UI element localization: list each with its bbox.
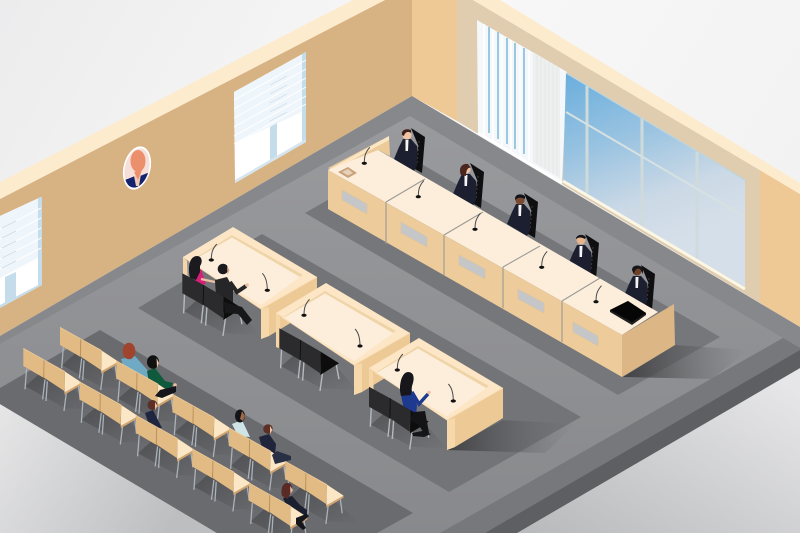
person: woman in row 2	[281, 483, 307, 520]
judges' bench	[328, 136, 675, 377]
row 2 chair pair 3	[136, 415, 210, 478]
left window 1	[0, 197, 42, 308]
floor zone: tables	[138, 234, 581, 492]
right window blinds	[477, 20, 567, 183]
background: lower left	[0, 404, 217, 533]
table 2 chairs	[279, 328, 357, 391]
right wall	[412, 0, 800, 327]
row 2 chair pair 4	[192, 449, 266, 512]
table 1 man's legs	[224, 302, 252, 325]
table 1 upper bodies	[189, 256, 249, 312]
person: red-haired woman	[121, 343, 150, 380]
background: lower right	[517, 368, 800, 533]
row 2 chair pair 1	[23, 348, 97, 411]
table 3 woman's legs	[410, 411, 431, 437]
table 1	[183, 227, 317, 339]
judge 5	[624, 265, 655, 310]
floor zone: audience	[0, 330, 413, 533]
judge 2	[453, 163, 484, 208]
bench top	[328, 150, 658, 335]
judge 1	[394, 128, 425, 173]
judge 3	[507, 193, 538, 238]
navy man's legs	[272, 451, 291, 464]
microphones on bench	[362, 147, 602, 303]
row 1 chair pair 1	[60, 327, 134, 390]
table 3	[369, 338, 503, 450]
table 3 chairs	[369, 387, 447, 449]
person: man in row 2	[145, 400, 162, 428]
table 3 woman	[400, 372, 431, 417]
black folder	[610, 301, 646, 325]
row 1 chair pair 2	[116, 361, 190, 424]
table 2	[276, 283, 410, 395]
bench shadow	[623, 345, 748, 379]
person: man in navy	[259, 424, 276, 458]
audience row 1	[60, 327, 359, 524]
bench front	[328, 170, 622, 377]
judge 4	[568, 234, 599, 279]
floor zone: judges	[305, 155, 720, 395]
row 1 chair pair 4	[229, 428, 303, 490]
bench left end panel	[328, 136, 390, 171]
table 3 shadow	[447, 420, 576, 453]
right window glass	[563, 73, 745, 289]
green person's legs	[155, 386, 176, 398]
person: woman in pale shirt	[232, 410, 250, 437]
name plaques	[342, 190, 598, 346]
woman's legs	[296, 514, 309, 530]
row 2 chair pair 5	[249, 483, 323, 533]
row 1 chair pair 3	[173, 394, 247, 457]
bench right end panel	[622, 304, 675, 377]
row 2 chair pair 2	[80, 382, 154, 444]
left window 2	[234, 52, 306, 183]
bench seams	[386, 179, 600, 342]
table 1 chairs	[182, 273, 260, 336]
person: man in green	[147, 355, 177, 396]
portrait on wall	[122, 146, 152, 190]
left wall	[0, 0, 412, 336]
audience row 2	[23, 348, 323, 533]
book	[338, 167, 357, 178]
row 1 chair pair 5	[285, 461, 359, 524]
